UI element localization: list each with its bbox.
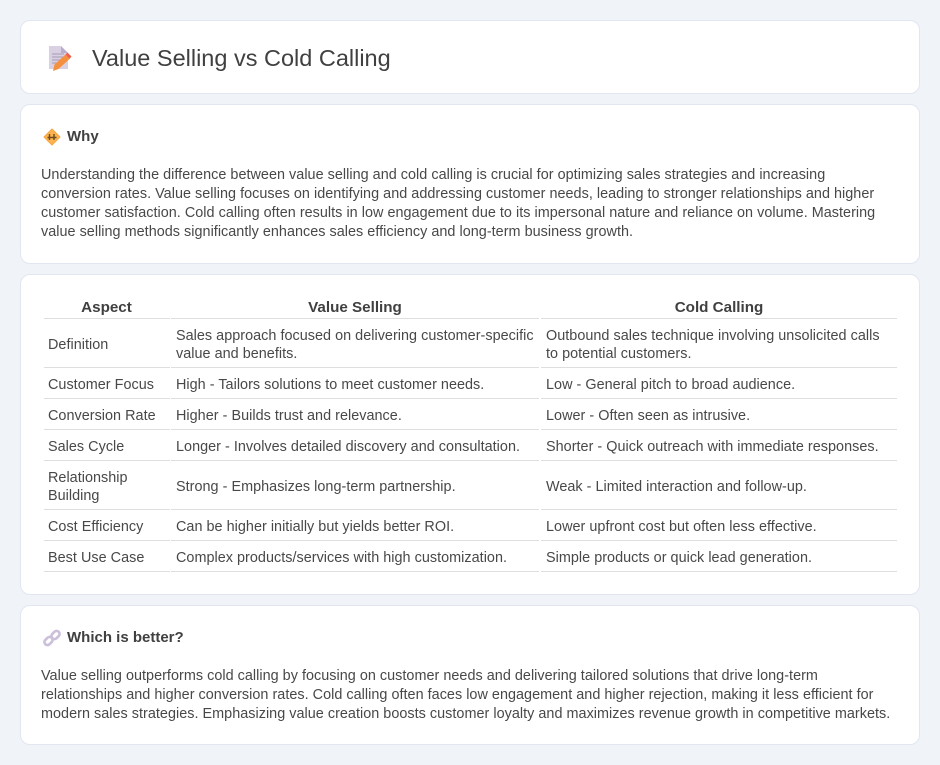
heading: why: Why (67, 128, 99, 145)
why text: customer satisfaction. Cold calling often results in low engagement due to its impersonal nature and reliance on volume. Mastering (41, 205, 875, 221)
table rows: Low - General pitch to broad audience. (546, 377, 795, 393)
table rows: High - Tailors solutions to meet customer needs. (176, 377, 484, 393)
table rows: to potential customers. (546, 346, 691, 362)
panel: title (20, 20, 920, 94)
table header: Cold Calling (675, 299, 763, 316)
table rows: Sales approach focused on delivering customer-specific (176, 328, 534, 344)
table rows: Lower - Often seen as intrusive. (546, 408, 750, 424)
table rows: Customer Focus (48, 377, 154, 393)
table header: Aspect (81, 299, 132, 316)
panel: why (20, 104, 920, 264)
table rows: Simple products or quick lead generation. (546, 550, 812, 566)
table rows: Weak - Limited interaction and follow-up. (546, 479, 807, 495)
table rows: Relationship (48, 470, 128, 486)
table rows: Longer - Involves detailed discovery and consultation. (176, 439, 520, 455)
heading: which is better: Which is better? (67, 629, 184, 646)
table rows: Outbound sales technique involving unsolicited calls (546, 328, 880, 344)
which is better text (41, 668, 890, 722)
title text: Value Selling vs Cold Calling (92, 45, 391, 71)
table rows: Best Use Case (48, 550, 144, 566)
table rows (44, 318, 897, 572)
why text: Understanding the difference between value selling and cold calling is crucial for optimizing sales strategies and increasing (41, 167, 825, 183)
why text: value selling methods significantly enhances sales efficiency and long-term business growth. (41, 224, 633, 240)
why text (41, 167, 875, 240)
which is better text: relationships and higher conversion rates. Cold calling often faces low engagement and higher rejection, making it less efficient for (41, 687, 873, 703)
table rows: Higher - Builds trust and relevance. (176, 408, 402, 424)
icon: diamond sign (44, 128, 60, 146)
table rows: Strong - Emphasizes long-term partnership. (176, 479, 456, 495)
table rows: Definition (48, 337, 108, 353)
icon: link (43, 630, 61, 646)
why text: conversion rates. Value selling focuses on identifying and addressing customer needs, leading to stronger relationships and higher (41, 186, 874, 202)
table rows: Conversion Rate (48, 408, 156, 424)
panel: comparison table (20, 274, 920, 595)
table rows: Shorter - Quick outreach with immediate responses. (546, 439, 879, 455)
table header: Value Selling (308, 299, 402, 316)
table rows: Cost Efficiency (48, 519, 143, 535)
panel: which is better (20, 605, 920, 745)
table header (81, 299, 763, 316)
table rows: Sales Cycle (48, 439, 124, 455)
which is better text: modern sales strategies. Emphasizing value creation boosts customer loyalty and maximizes revenue growth in competitive markets. (41, 706, 890, 722)
table rows: Can be higher initially but yields better ROI. (176, 519, 454, 535)
table rows: Complex products/services with high customization. (176, 550, 507, 566)
icon: memo with pencil (49, 46, 72, 71)
table rows: Lower upfront cost but often less effective. (546, 519, 817, 535)
table rows: Building (48, 488, 99, 504)
table rows: value and benefits. (176, 346, 297, 362)
which is better text: Value selling outperforms cold calling by focusing on customer needs and delivering tailored solutions that drive long-term (41, 668, 818, 684)
